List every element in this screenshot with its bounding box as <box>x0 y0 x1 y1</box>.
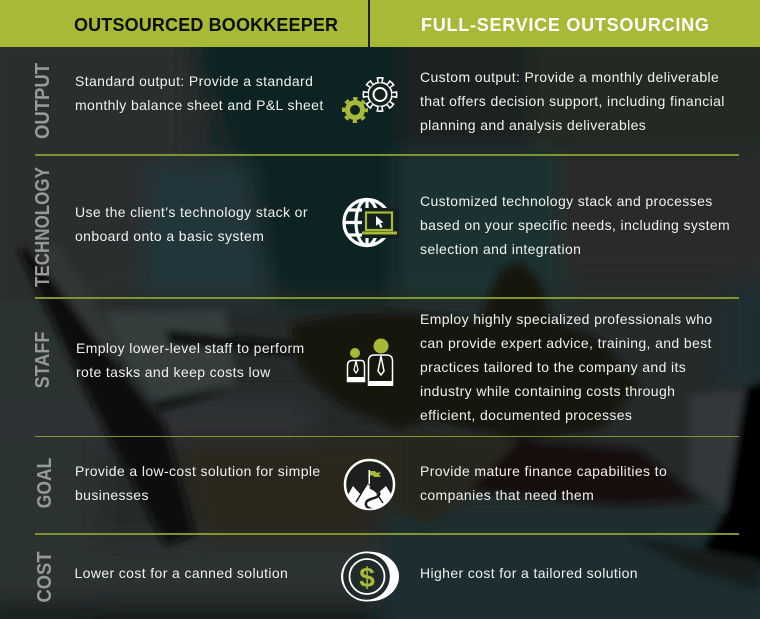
icon: mountain with flag <box>344 458 396 510</box>
text: staff right: efficient, documented processes <box>420 407 632 423</box>
text: output left: monthly balance sheet and P&L sheet <box>75 97 324 113</box>
text: technology left: onboard onto a basic system <box>75 228 264 244</box>
row label: goal: GOAL <box>34 457 56 508</box>
text: goal right: Provide mature finance capabilities to <box>420 463 667 479</box>
row label: technology: TECHNOLOGY <box>32 167 54 287</box>
text: staff right: can provide expert advice, training, and best <box>420 335 712 351</box>
text: output left <box>75 73 324 113</box>
icon: dollar coin: $ <box>359 562 375 593</box>
text: cost right: Higher cost for a tailored solution <box>420 565 638 581</box>
text: technology right: selection and integration <box>420 241 581 257</box>
text: technology left <box>75 204 308 244</box>
header divider <box>368 0 370 47</box>
text: output right: that offers decision support, including financial <box>420 93 725 109</box>
text: goal left <box>75 463 321 503</box>
text: staff left: rote tasks and keep costs low <box>76 364 271 380</box>
text: technology left: Use the client’s technology stack or <box>75 204 308 220</box>
icon: staff <box>346 338 394 386</box>
text: output right <box>420 69 725 133</box>
icon: gears <box>342 77 398 123</box>
row label: output: OUTPUT <box>32 62 54 139</box>
text: cost left: Lower cost for a canned solution <box>74 565 288 581</box>
icon: globe with laptop <box>342 198 399 248</box>
text: output left: Standard output: Provide a standard <box>75 73 313 89</box>
text: staff right <box>420 311 713 423</box>
text: technology right: Customized technology stack and processes <box>420 193 713 209</box>
text: goal right: companies that need them <box>420 487 594 503</box>
text: staff right: practices tailored to the company and its <box>420 359 686 375</box>
row label: staff: STAFF <box>32 332 54 388</box>
icon: dollar coin <box>341 552 399 602</box>
row label: cost: COST <box>34 551 56 603</box>
heading: outsourced bookkeeper: OUTSOURCED BOOKKEEPER <box>74 15 338 35</box>
text: staff right: Employ highly specialized professionals who <box>420 311 713 327</box>
text: staff left <box>76 340 305 380</box>
text: staff left: Employ lower-level staff to perform <box>76 340 305 356</box>
text: goal right <box>420 463 667 503</box>
text: goal left: Provide a low-cost solution for simple <box>75 463 321 479</box>
text: staff right: industry while containing costs through <box>420 383 675 399</box>
text: goal left: businesses <box>75 487 149 503</box>
heading: full-service outsourcing: FULL-SERVICE OUTSOURCING <box>421 15 710 35</box>
text: output right: Custom output: Provide a monthly deliverable <box>420 69 719 85</box>
header band <box>0 0 760 47</box>
text: technology right <box>420 193 730 257</box>
text: technology right: based on your specific needs, including system <box>420 217 730 233</box>
text: output right: planning and analysis deliverables <box>420 117 646 133</box>
